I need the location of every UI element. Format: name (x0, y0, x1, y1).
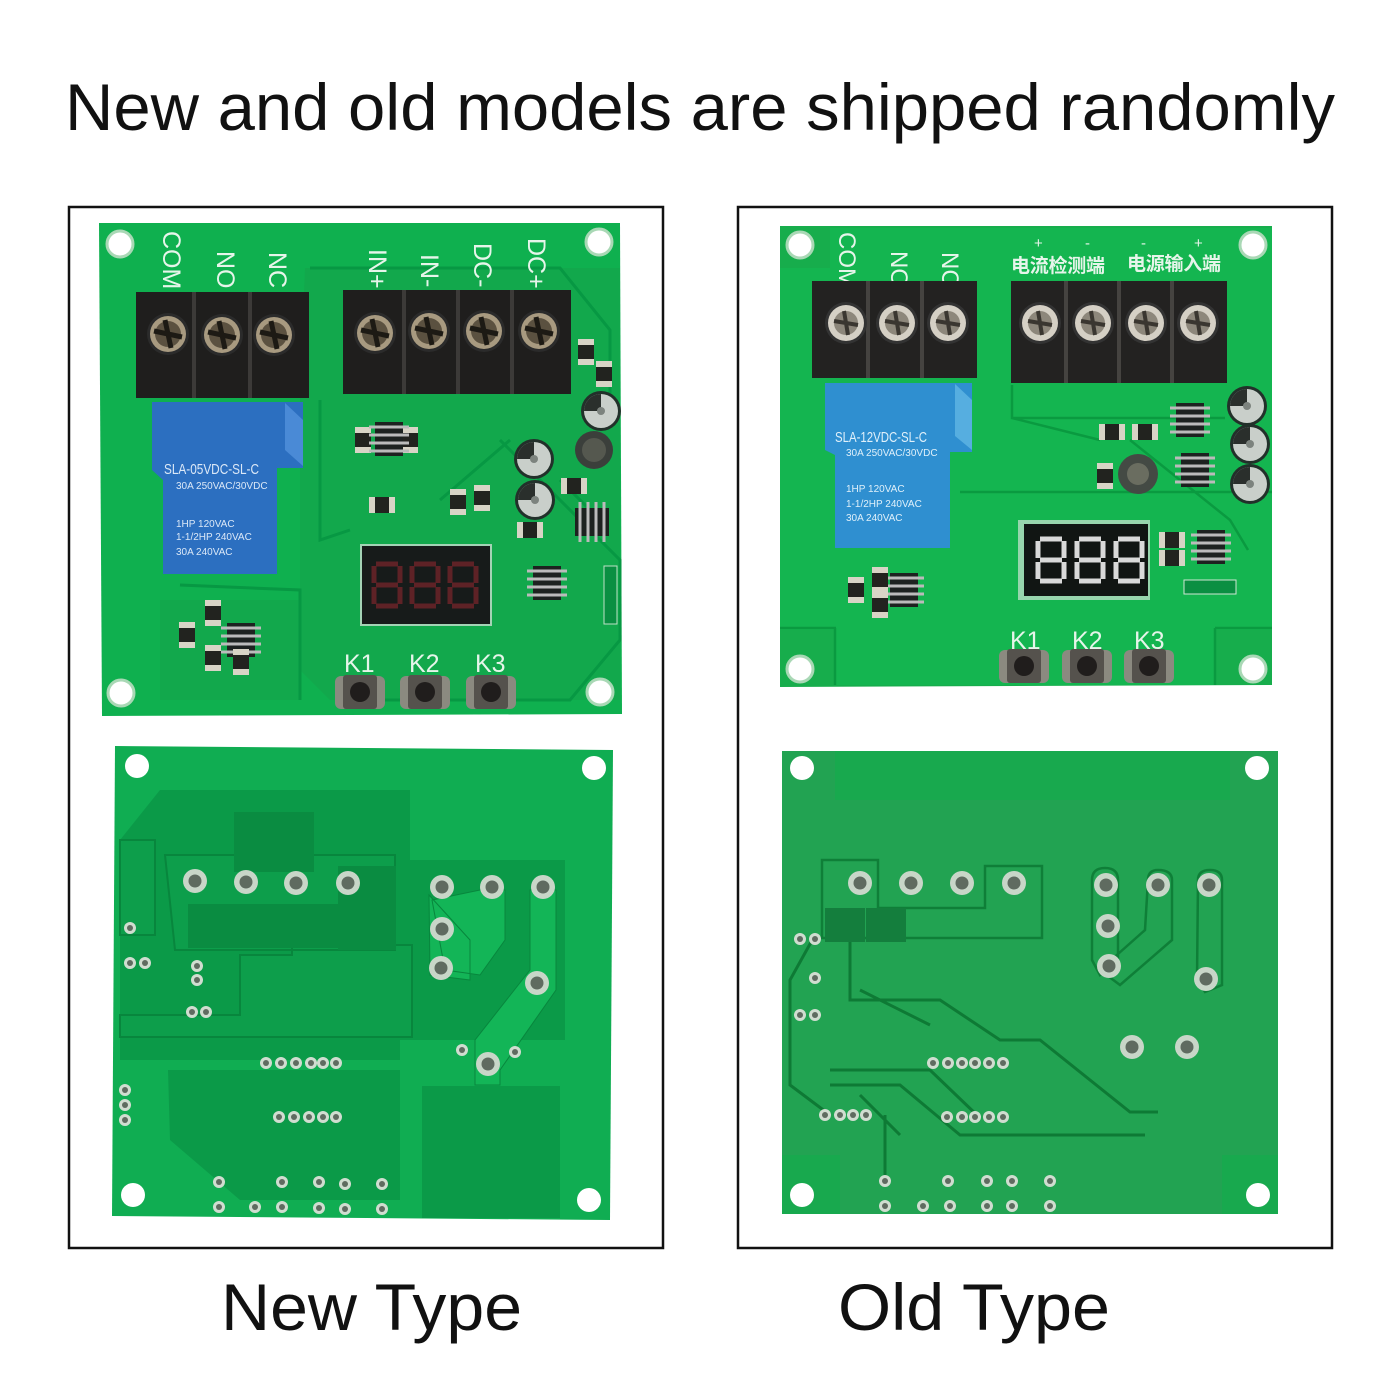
terminal labels: DC+ (522, 238, 550, 289)
terminal labels: 电源输入端 (1127, 252, 1221, 275)
terminal blocks (136, 290, 571, 398)
buttons: K2 (1072, 627, 1103, 655)
buttons: K3 (475, 650, 506, 678)
terminal labels: IN+ (363, 249, 391, 289)
old type board front (780, 226, 1272, 687)
caption: new type: New Type (221, 1270, 522, 1344)
terminal labels: 电流检测端 (1011, 254, 1105, 277)
new type board back (112, 746, 613, 1220)
terminal labels: NO (211, 251, 239, 288)
buttons (335, 650, 516, 709)
buttons: K1 (344, 650, 375, 678)
relay: 30A 250VAC/30VDC (846, 448, 938, 459)
relay: SLA-05VDC-SL-C (164, 461, 259, 478)
terminal labels: NC (263, 252, 291, 288)
terminal labels: IN- (415, 254, 443, 287)
components (179, 339, 621, 675)
caption: old type: Old Type (838, 1270, 1110, 1344)
relay: 1-1/2HP 240VAC (176, 532, 252, 543)
title: New and old models are shipped randomly (65, 70, 1335, 144)
components (848, 386, 1270, 618)
panel: new type (69, 207, 663, 1248)
relay: 1-1/2HP 240VAC (846, 499, 922, 510)
relay: 30A 240VAC (846, 513, 903, 524)
terminal labels (157, 231, 550, 289)
buttons: K1 (1010, 627, 1041, 655)
relay (152, 402, 303, 574)
terminal blocks (812, 281, 1227, 383)
buttons: K3 (1134, 627, 1165, 655)
terminal labels: COM (157, 231, 185, 289)
terminal labels: + (1194, 235, 1203, 252)
old type board back (782, 751, 1278, 1214)
terminal labels: DC- (468, 243, 496, 287)
terminal labels: - (1085, 235, 1090, 252)
terminal labels: COM (833, 232, 860, 288)
panel: old type (738, 207, 1332, 1248)
display (1018, 520, 1150, 600)
terminal labels: NC (936, 252, 963, 287)
terminal labels: - (1141, 235, 1146, 252)
terminal labels: NO (885, 251, 912, 287)
display (360, 544, 492, 626)
relay: SLA-12VDC-SL-C (835, 429, 927, 446)
terminal labels: + (1034, 235, 1043, 252)
new type board front (99, 223, 622, 716)
relay: 1HP 120VAC (846, 484, 905, 495)
buttons: K2 (409, 650, 440, 678)
relay: 1HP 120VAC (176, 519, 235, 530)
relay: 30A 240VAC (176, 547, 233, 558)
relay (825, 383, 972, 548)
buttons (999, 627, 1174, 683)
relay: 30A 250VAC/30VDC (176, 481, 268, 492)
terminal labels (833, 232, 1221, 288)
